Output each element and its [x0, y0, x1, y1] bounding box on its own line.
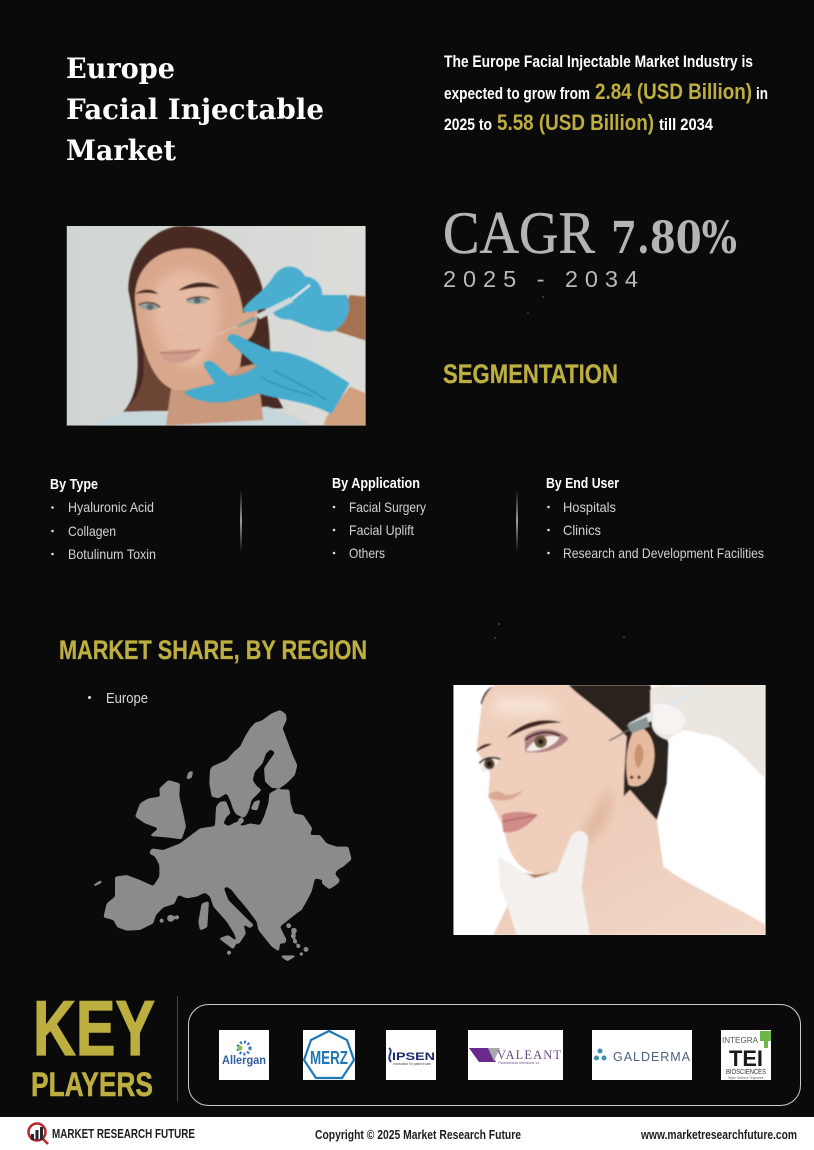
logo: Ipsen [386, 1030, 436, 1080]
region label: Europe [88, 690, 148, 707]
region label: Europe: Europe [106, 690, 148, 707]
logo: Merz: MERZ [310, 1048, 348, 1068]
logo: Galderma: GALDERMA [613, 1050, 691, 1064]
heading: market share by region: MARKET SHARE, BY REGION [59, 635, 367, 665]
logo: Valeant: VALEANT [497, 1048, 561, 1062]
market forecast text: 2025 to [444, 116, 492, 134]
heading: CAGR: 2025 - 2034 [443, 266, 638, 292]
heading: segmentation: SEGMENTATION [443, 359, 618, 389]
market forecast text [444, 53, 768, 135]
list: by type: Hyaluronic Acid [68, 499, 154, 515]
panel: key players logos [188, 1004, 800, 1106]
heading: CAGR: CAGR [443, 200, 595, 266]
logo: Valeant: Pharmaceuticals International, Inc. [498, 1061, 540, 1065]
logo: Allergan: Allergan [222, 1055, 266, 1067]
title: Facial Injectable [66, 93, 324, 126]
heading: key players: PLAYERS [31, 1066, 153, 1104]
title [66, 52, 324, 167]
list: by end user: By End User [546, 475, 619, 492]
list: by end user: Hospitals [563, 499, 616, 515]
heading: CAGR [443, 200, 737, 292]
list: by type: By Type [50, 476, 98, 493]
logo: Integra TEI Biosciences [721, 1030, 771, 1080]
list: by end user: Research and Development Facilities [563, 545, 764, 561]
logo: Galderma [592, 1030, 692, 1080]
list: by application: Facial Uplift [349, 522, 414, 538]
market forecast text: The Europe Facial Injectable Market Industry is [444, 53, 753, 71]
list: by type: Botulinum Toxin [68, 546, 156, 562]
logo: Allergan [219, 1030, 269, 1080]
list: by type: Collagen [68, 523, 116, 539]
logo: Integra TEI Biosciences: Repair. Reinforce. Regenerate. [728, 1076, 764, 1080]
logo: Integra TEI Biosciences: BIOSCIENCES [726, 1069, 766, 1076]
market forecast text: till 2034 [659, 116, 714, 134]
footer copyright: Copyright © 2025 Market Research Future [315, 1127, 521, 1142]
footer logo: Market Research Future: MARKET RESEARCH FUTURE [52, 1126, 195, 1141]
list: by application [332, 475, 426, 561]
logo: Ipsen: Innovation for patient care [393, 1062, 431, 1066]
title: Europe [66, 52, 175, 85]
market forecast text: 5.58 (USD Billion) [497, 110, 654, 135]
list: by end user [546, 475, 764, 561]
heading: CAGR: 7.80% [611, 213, 737, 264]
map: Europe [93, 710, 352, 961]
footer logo: Market Research Future [28, 1124, 195, 1144]
logo: Integra TEI Biosciences: TEI [729, 1046, 763, 1071]
list: by end user: Clinics [563, 522, 601, 538]
market forecast text: in [756, 85, 768, 103]
logo: Valeant [468, 1030, 563, 1080]
market forecast text: 2.84 (USD Billion) [595, 79, 752, 104]
list: by application: Others [349, 545, 385, 561]
logo: Integra TEI Biosciences: INTEGRA [722, 1035, 758, 1045]
list: by type [50, 476, 156, 562]
photo: injection into cheek with blue gloves [67, 226, 366, 426]
photo: temple injection with white gloves [453, 685, 766, 935]
decorative specks [494, 296, 625, 639]
list: by application: Facial Surgery [349, 499, 426, 515]
heading: key players [31, 984, 155, 1104]
logo: Merz [303, 1030, 355, 1080]
title: Market [66, 134, 176, 167]
list: by application: By Application [332, 475, 420, 492]
logo: Ipsen: IPSEN [392, 1051, 435, 1063]
footer [0, 1117, 814, 1150]
heading: key players: KEY [33, 984, 155, 1072]
market forecast text: expected to grow from [444, 85, 590, 103]
